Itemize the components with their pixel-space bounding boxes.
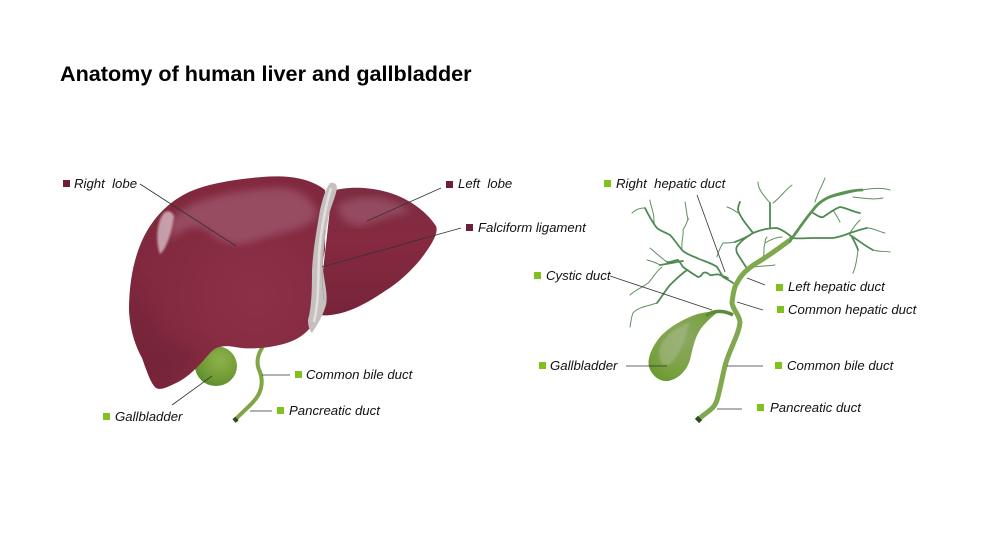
label: Common bile duct (liver): Common bile duct xyxy=(306,367,414,382)
gallbladder behind liver xyxy=(195,346,237,386)
leader lines xyxy=(140,184,765,411)
label: Cystic duct: Cystic duct xyxy=(546,268,612,283)
gallbladder on duct diagram xyxy=(649,312,718,381)
main branches xyxy=(645,190,873,303)
label: Pancreatic duct (ducts): Pancreatic duct xyxy=(770,400,862,415)
label: Left hepatic duct: Left hepatic duct xyxy=(788,279,886,294)
thin branches xyxy=(630,178,890,327)
common bile duct on liver xyxy=(236,348,262,419)
liver highlights xyxy=(129,188,318,388)
label: Falciform ligament: Falciform ligament xyxy=(478,220,587,235)
label: Gallbladder (ducts): Gallbladder xyxy=(550,358,618,373)
bile duct tree illustration xyxy=(630,178,890,421)
label: Common hepatic duct: Common hepatic duct xyxy=(788,302,918,317)
title: Anatomy of human liver and gallbladder xyxy=(60,61,472,86)
falciform ligament xyxy=(308,183,337,333)
right lobe xyxy=(129,176,325,389)
label: Left lobe: Left lobe xyxy=(458,176,512,191)
label: Common bile duct (ducts): Common bile duct xyxy=(787,358,895,373)
label: Right lobe: Right lobe xyxy=(74,176,137,191)
left lobe xyxy=(318,188,437,315)
label: Pancreatic duct (liver): Pancreatic duct xyxy=(289,403,381,418)
ducts xyxy=(706,311,733,316)
liver illustration xyxy=(129,176,437,421)
label: Right hepatic duct: Right hepatic duct xyxy=(616,176,727,191)
label: Gallbladder (liver): Gallbladder xyxy=(115,409,183,424)
